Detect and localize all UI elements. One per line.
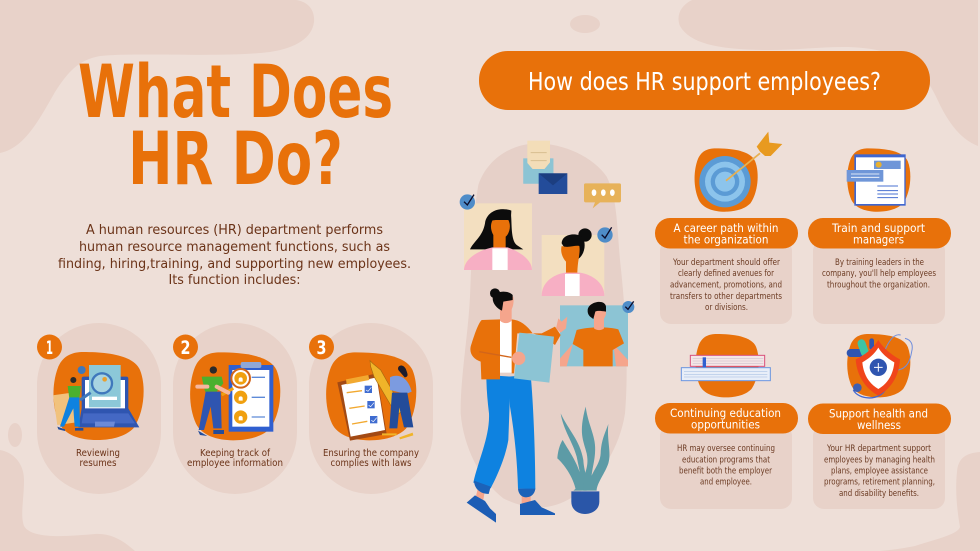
heading pill: [808, 218, 951, 248]
icon: web document: [847, 148, 910, 212]
body text: [824, 444, 935, 499]
body text: throughout the organization.: [827, 280, 930, 290]
heading banner: [479, 51, 930, 110]
icon: shield and stethoscope: [847, 334, 912, 398]
heading pill: [808, 404, 951, 434]
icon: clipboard with people: [190, 352, 280, 440]
body text: [822, 258, 936, 290]
heading banner: How does HR support employees?: [528, 67, 881, 96]
panel: continuing education: [655, 334, 798, 509]
body text: employees by managing health: [824, 456, 935, 466]
number 3: [309, 334, 334, 360]
icon: check badge: [622, 301, 634, 313]
panel: employee information: [173, 323, 297, 494]
label: [323, 448, 419, 469]
heading pill: opportunities: [691, 418, 760, 432]
label: Reviewing: [76, 448, 120, 459]
heading pill: the organization: [684, 232, 768, 246]
label: Keeping track of: [200, 448, 271, 459]
intro paragraph: finding, hiring,training, and supporting new employees.: [58, 257, 411, 272]
icon: target and arrow: [695, 132, 782, 212]
label: complies with laws: [330, 458, 412, 469]
body text: company, you'll help employees: [822, 269, 936, 279]
illustration: HR team: [460, 141, 634, 523]
plant: [557, 407, 610, 514]
heading pill: A career path within: [674, 221, 778, 235]
panel: complies with laws: [309, 323, 433, 494]
body text: benefit both the employer: [679, 466, 772, 476]
body text: advancement, promotions, and: [670, 280, 782, 290]
label: Ensuring the company: [323, 448, 419, 459]
intro paragraph: human resource management functions, such as: [79, 240, 390, 255]
number 3: 3: [316, 337, 326, 359]
body text: Your department should offer: [672, 258, 780, 268]
body text: transfers to other departments: [670, 292, 782, 302]
figure: woman with folder: [467, 288, 567, 523]
body text: clearly defined avenues for: [678, 269, 774, 279]
number 2: 2: [180, 337, 190, 359]
number 1: [37, 334, 62, 360]
heading pill: managers: [853, 232, 904, 246]
icon: chat bubble: [584, 183, 621, 208]
portrait: woman with bun: [542, 228, 604, 296]
number 2: [173, 334, 198, 360]
body text: and disability benefits.: [839, 489, 919, 499]
label: [187, 448, 283, 469]
portrait: man on video: [560, 302, 628, 366]
body text: or divisions.: [705, 303, 748, 313]
body text: and employee.: [700, 478, 752, 488]
heading pill: Train and support: [831, 221, 925, 235]
icon: envelopes: [523, 141, 567, 194]
icon: books: [681, 334, 770, 397]
heading pill: Support health and: [829, 406, 928, 420]
body text: By training leaders in the: [835, 258, 924, 268]
heading pill: wellness: [857, 418, 901, 432]
label: [76, 448, 120, 469]
body text: education programs that: [682, 456, 771, 466]
body text: plans, employee assistance: [831, 466, 928, 476]
intro paragraph: A human resources (HR) department performs: [86, 223, 383, 238]
body text: [670, 258, 782, 313]
label: employee information: [187, 458, 283, 469]
number 1: 1: [46, 337, 53, 359]
icon: checklist and pencil: [326, 352, 416, 441]
body text: [677, 444, 775, 488]
body text: Your HR department support: [826, 444, 932, 454]
icon: check badge: [460, 194, 475, 210]
portrait: woman with long hair: [464, 203, 532, 270]
body text: HR may oversee continuing: [677, 444, 775, 454]
intro paragraph: [58, 223, 411, 288]
title: [78, 49, 393, 202]
icon: check badge: [597, 227, 613, 243]
title: HR Do?: [128, 118, 343, 202]
panel: career path: [655, 132, 798, 324]
panel: train managers: [808, 148, 951, 324]
panel: health and wellness: [808, 334, 951, 509]
heading pill: [655, 218, 798, 248]
panel: reviewing resumes: [37, 323, 161, 494]
body text: programs, retirement planning,: [824, 478, 935, 488]
heading pill: Continuing education: [670, 406, 781, 420]
icon: laptop and resume: [53, 352, 144, 440]
heading pill: [655, 403, 798, 434]
label: resumes: [80, 458, 116, 469]
intro paragraph: Its function includes:: [168, 273, 300, 288]
title: What Does: [78, 49, 393, 134]
